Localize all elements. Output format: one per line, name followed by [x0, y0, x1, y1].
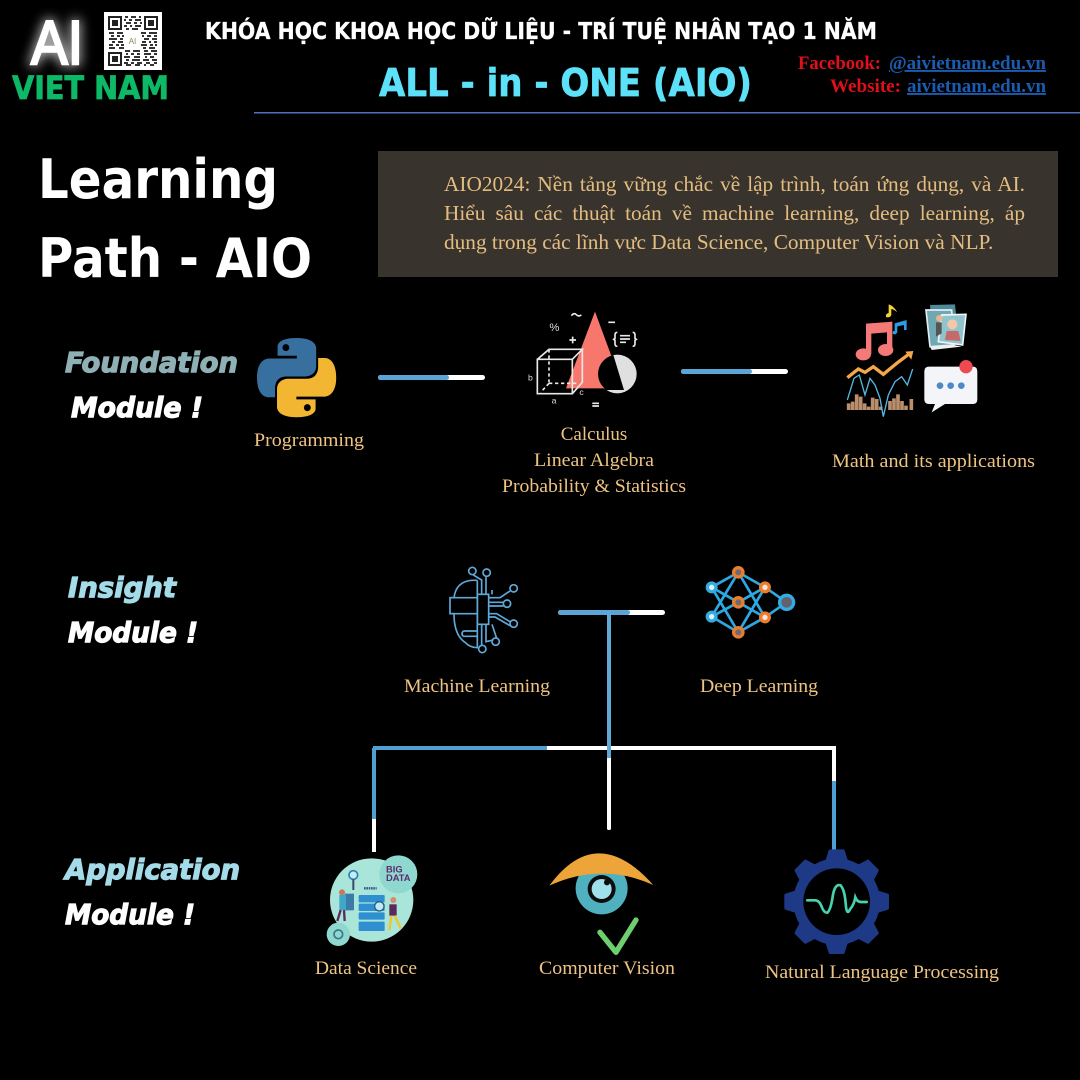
QR code: AI — [129, 37, 136, 46]
website label: Website: — [830, 76, 901, 97]
label: Math and its applications: Math and its applications — [832, 451, 1035, 472]
logo: AI Viet Nam — [12, 9, 169, 107]
connector: math to applications — [681, 369, 788, 374]
header title: KHÓA HỌC KHOA HỌC DỮ LIỆU - TRÍ TUỆ NHÂN TẠO 1 NĂM — [205, 17, 877, 45]
Insight word: Insight — [68, 571, 178, 604]
label: Machine Learning: Machine Learning — [404, 676, 551, 697]
website link: aivietnam.edu.vn — [907, 76, 1046, 97]
heading line 1: Learning — [38, 148, 278, 211]
heading line 2: Path - AIO — [38, 227, 312, 290]
icon: data science: BIG — [386, 864, 403, 874]
icon: data science — [327, 855, 417, 946]
facebook label: Facebook: — [798, 53, 881, 74]
icon: math applications collage — [847, 304, 977, 417]
label: Programming: Programming — [254, 430, 365, 451]
icon: math shapes: c — [579, 387, 584, 397]
icon: NLP gear — [786, 851, 888, 953]
foundation module label — [65, 346, 238, 424]
icon: math shapes: b — [528, 373, 533, 383]
icon: python logo — [257, 338, 336, 417]
icon: deep learning network — [707, 568, 794, 637]
logo glow AI: AI — [31, 9, 83, 78]
label: Probability and Statistics: Probability & Statistics — [502, 476, 686, 497]
right branch — [832, 748, 836, 852]
label: Linear Algebra: Linear Algebra — [534, 450, 655, 471]
trend chart — [847, 351, 913, 417]
centre branch — [607, 612, 611, 830]
connector: programming to math — [378, 375, 485, 380]
insight module label — [68, 571, 198, 649]
description line 2: Hiểu sâu các thuật toán về machine learning, deep learning, áp — [444, 201, 1025, 225]
facebook link: @aivietnam.edu.vn — [889, 53, 1046, 74]
main heading — [38, 148, 312, 290]
connector: application tree — [372, 610, 836, 852]
logo AI letters: AI — [31, 9, 83, 78]
label: Calculus: Calculus — [561, 424, 627, 445]
music notes — [856, 304, 907, 360]
Module word: Module ! — [65, 898, 195, 931]
icon: math shapes: % — [549, 322, 559, 334]
Application word: Application — [63, 853, 240, 886]
label: Deep Learning: Deep Learning — [700, 676, 819, 697]
photo cards — [926, 304, 966, 350]
description panel — [378, 151, 1058, 277]
icon: computer vision eye — [549, 853, 653, 952]
icon: machine learning brain chip — [450, 567, 517, 653]
contact links — [798, 53, 1046, 97]
header subtitle: ALL - in - ONE (AIO) — [379, 61, 752, 105]
Module word: Module ! — [68, 616, 198, 649]
branch bar — [373, 746, 836, 750]
label: Natural Language Processing: Natural Language Processing — [765, 962, 1000, 983]
label: Computer Vision: Computer Vision — [539, 958, 676, 979]
description line 3: dụng trong các lĩnh vực Data Science, Computer Vision và NLP. — [444, 230, 993, 254]
insight bar — [558, 610, 665, 615]
Foundation word: Foundation — [65, 346, 238, 379]
description line 1: AIO2024: Nền tảng vững chắc về lập trình, toán ứng dụng, và AI. — [444, 172, 1025, 196]
label: Data Science: Data Science — [315, 958, 417, 979]
label: math subjects — [502, 424, 686, 497]
icon: data science: DATA — [386, 873, 411, 883]
icon: math shapes: a — [552, 395, 557, 405]
logo VIET NAM: VIET NAM — [12, 69, 169, 107]
QR code — [104, 12, 162, 70]
application module label — [63, 853, 240, 931]
left branch — [372, 748, 376, 852]
Module word: Module ! — [71, 391, 203, 424]
icon: math shapes — [528, 312, 637, 406]
chat bubble — [924, 360, 977, 412]
